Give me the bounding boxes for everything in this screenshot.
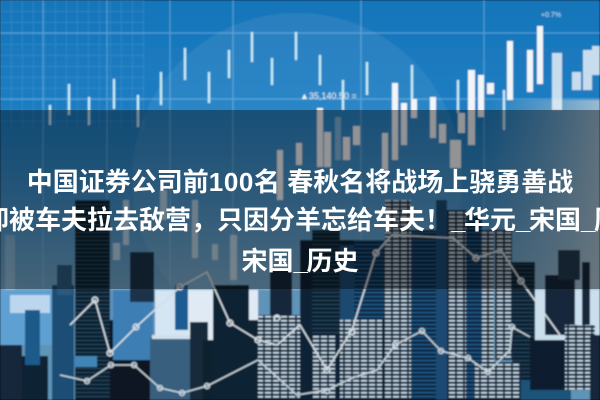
far city	[0, 290, 600, 400]
line chart upper	[70, 235, 560, 373]
right side light wash	[300, 100, 600, 300]
title backdrop band	[0, 110, 600, 289]
line chart lower	[60, 324, 530, 396]
thin candle wicks	[50, 32, 504, 130]
price label: ▲35,140.50 =	[300, 91, 357, 101]
negative badge	[74, 356, 97, 367]
candle bodies	[5, 26, 600, 290]
title line 1: 中国证券公司前100名 春秋名将战场上骁勇善战	[27, 167, 573, 197]
title line 3: 宋国_历史	[242, 246, 358, 276]
grid area	[0, 0, 145, 130]
percent label: +0.7%	[541, 12, 561, 19]
globe arc	[132, 13, 462, 343]
buildings	[0, 200, 600, 400]
